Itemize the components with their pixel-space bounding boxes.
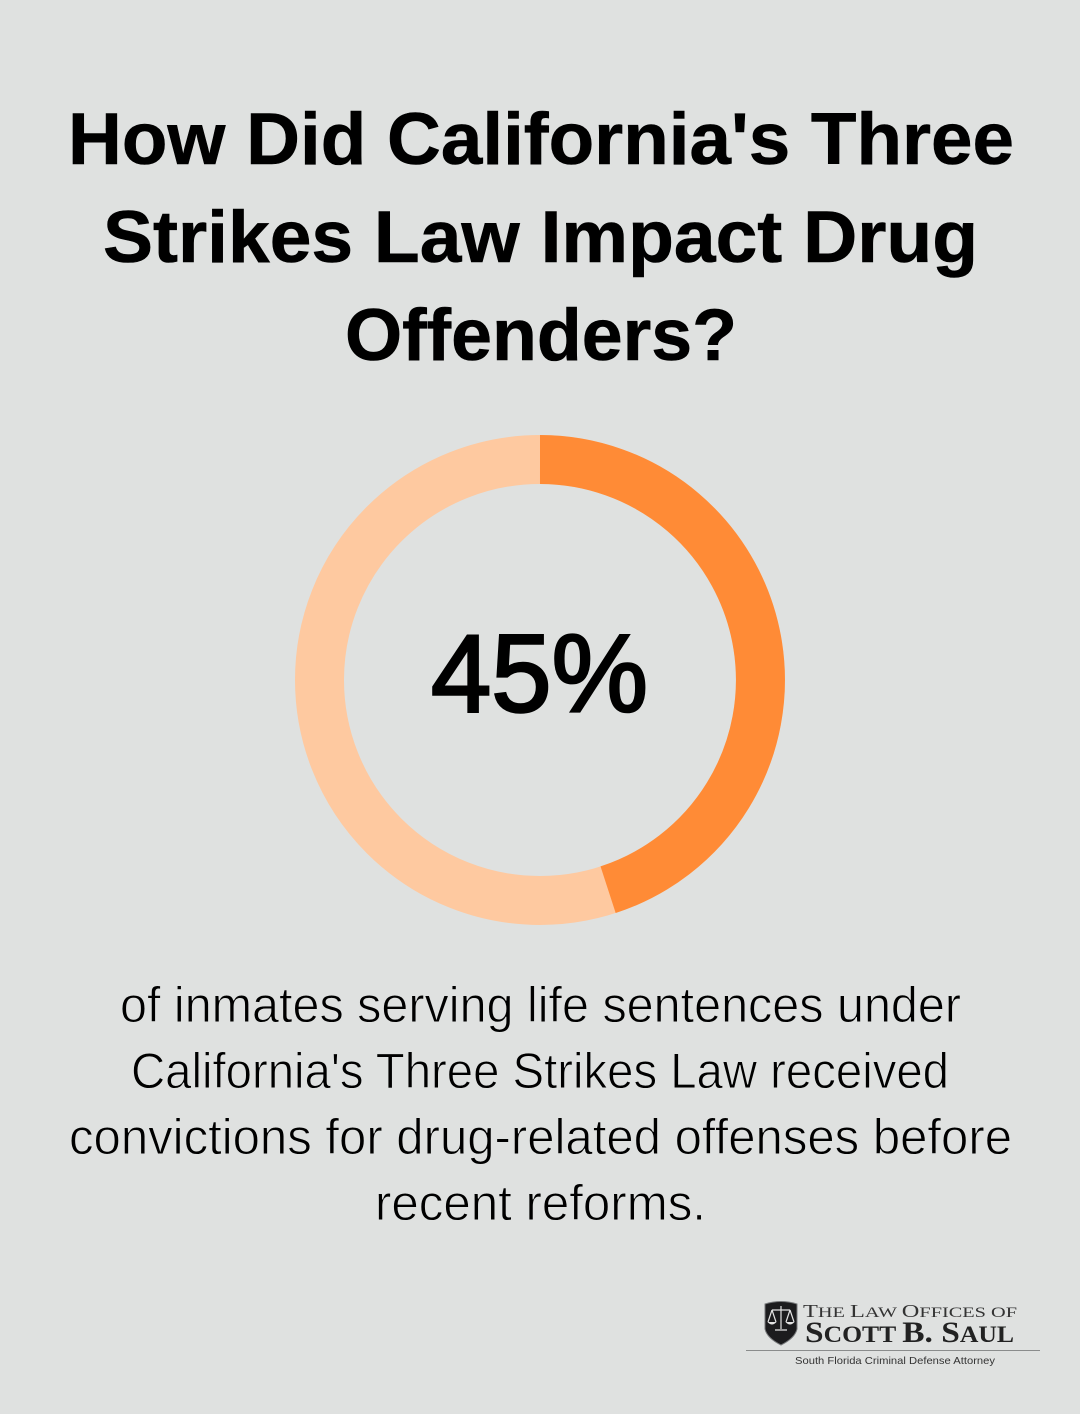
title: Offenders? [345, 295, 737, 376]
logo: The Law Offices of Scott B. Saul [746, 1301, 1040, 1367]
description text [69, 977, 1012, 1231]
title [68, 99, 1014, 376]
title: Strikes Law Impact Drug [103, 197, 978, 278]
icon: shield with scales [765, 1302, 797, 1345]
description text: convictions for drug-related offenses before [69, 1109, 1012, 1165]
statistic: 45%: 45% [431, 612, 648, 736]
logo text: scott b. saul: SCOTT B. S AUL [805, 1316, 1014, 1349]
title: How Did California's Three [68, 99, 1014, 180]
description text: of inmates serving life sentences under [120, 977, 961, 1033]
logo text: the law offices of: T HE L AW O FFICES OF [803, 1301, 1017, 1321]
logo tagline: South Florida Criminal Defense Attorney [795, 1355, 996, 1367]
logo divider [746, 1350, 1040, 1351]
description text: recent reforms. [375, 1175, 706, 1231]
donut chart: 45% [320, 460, 760, 900]
description text: California's Three Strikes Law received [131, 1043, 949, 1099]
